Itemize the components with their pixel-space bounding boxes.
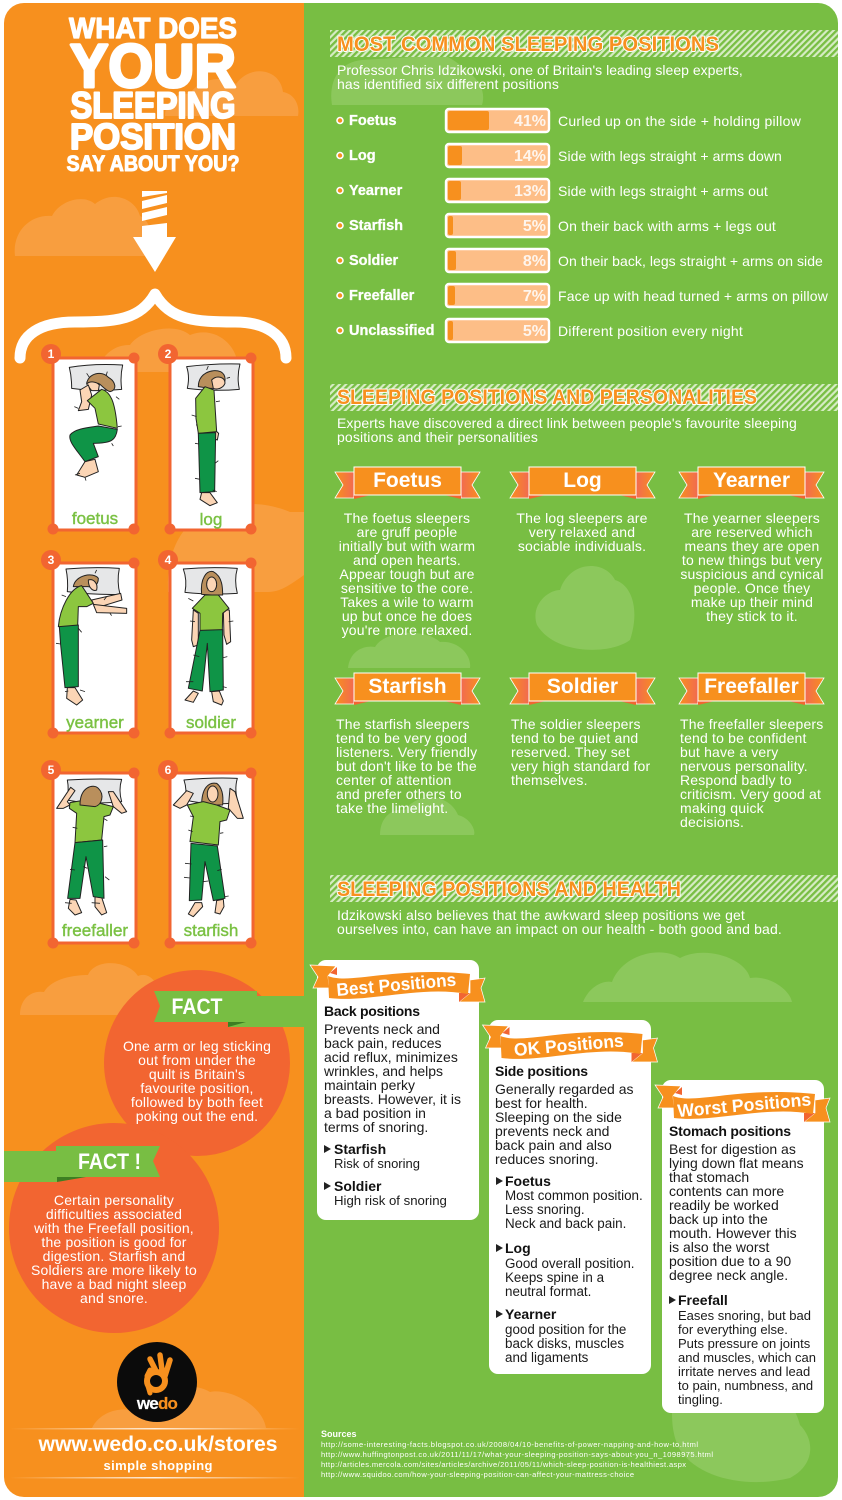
figure: yearner [56,568,127,705]
text: foetus [339,510,475,638]
text: worst intro: position due to a 90 [669,1253,791,1269]
background clouds: orange [15,71,304,1428]
item: yearner: Yearner [505,1306,557,1322]
section heading: personalities: SLEEPING POSITIONS AND PERSONALITIES [337,386,757,409]
text: starfish: take the limelight. [336,800,448,816]
text: log: The log sleepers are [516,510,648,526]
text: foetus: and open hearts. [353,552,461,568]
sources: Sources [321,1429,357,1439]
row: foetus: Foetus [349,113,397,129]
ribbon: starfish [335,673,480,705]
intro: health: Idzikowski also believes that the awkward sleep positions we get [337,907,745,923]
panel: green right column [304,3,838,1497]
fact text 1: quilt is Britain's [149,1066,245,1082]
title: WHAT DOES [69,13,237,45]
fact text 2: Certain personality [54,1192,174,1208]
bar chart [337,109,829,342]
fact circle 1 [104,970,304,1156]
item: soldier [324,1178,447,1208]
fact banner 2 [4,1146,160,1182]
title: SLEEPING [70,85,236,126]
text: freefaller: decisions. [680,814,744,830]
fact text 2: with the Freefall position, [33,1220,194,1236]
section heading: health [330,875,838,902]
text: worst intro: is also the worst [669,1239,769,1255]
text: log: very relaxed and [529,524,635,540]
text: yearner: people. Once they [694,580,810,596]
text: freefaller: criticism. Very good at [680,786,821,802]
item: foetus: Less snoring. [505,1202,585,1217]
text: starfish: tend to be very good [336,730,467,746]
arrow [133,191,176,272]
title: YOUR [70,32,236,100]
text: freefaller: Respond badly to [680,772,792,788]
text: yearner: are reserved which [691,524,813,540]
item: foetus: Neck and back pain. [505,1216,626,1231]
text: worst intro: contents can more [669,1183,784,1199]
text: starfish: and prefer others to [336,786,462,802]
text: freefaller [680,716,823,830]
row: foetus: 41% [514,113,546,130]
ribbon: best positions [310,965,485,1002]
card 4: soldier: 4 [165,553,172,567]
row: foetus: Curled up on the side + holding pillow [558,113,802,129]
text: worst intro: mouth. However this [669,1225,797,1241]
section heading: most common [330,30,838,57]
text: yearner: The yearner sleepers [684,510,820,526]
item: freefall: to pain, numbness, and [678,1378,813,1393]
text: worst intro: degree neck angle. [669,1267,788,1283]
panel: worst positions: Stomach positions [669,1123,791,1139]
row: foetus [337,109,802,132]
item: yearner: and ligaments [505,1350,589,1365]
ribbon: ok positions [482,1025,658,1062]
text: freefaller: nervous personality. [680,758,808,774]
sources: http://some-interesting-facts.blogspot.co.uk/2008/04/10-benefits-of-power-napping-and-how-to.html [321,1440,698,1449]
row: freefaller: Face up with head turned + arms on pillow [558,288,829,304]
card 2: log [158,344,256,534]
item: yearner: back disks, muscles [505,1336,624,1351]
text: soldier: very high standard for [511,758,651,774]
fact text 1: out from under the [138,1052,256,1068]
item: log: Keeps spine in a [505,1270,605,1285]
item: freefall: irritate nerves and lead [678,1364,810,1379]
intro: personalities: positions and their personalities [337,429,538,445]
panel: ok positions [482,1020,658,1374]
website: www.wedo.co.uk/stores [37,1433,278,1456]
ribbon: foetus: Foetus [373,469,442,492]
text: best intro: a bad position in [324,1105,426,1121]
text: foetus: Appear tough but are [339,566,475,582]
logo [117,1342,197,1422]
intro: most common [337,62,743,92]
fact banner 2: FACT ! [78,1149,141,1174]
figure: log [187,364,240,506]
fact text 1: poking out the end. [136,1108,258,1124]
text: foetus: are gruff people [357,524,457,540]
ribbon: yearner: Yearner [713,469,790,492]
card 2: log: log [200,510,222,529]
text: starfish: center of attention [336,772,452,788]
figure: soldier [183,568,237,705]
row: log: 14% [514,148,546,165]
text: soldier: reserved. They set [511,744,630,760]
fact text 1 [123,1038,271,1124]
card 5: freefaller: 5 [48,763,55,777]
sources: http://articles.mercola.com/sites/articles/archive/2011/05/11/which-sleep-position-is-healthiest.aspx [321,1460,686,1469]
fact text 1: favourite position, [140,1080,254,1096]
text: yearner [680,510,824,624]
intro: most common: Professor Chris Idzikowski, one of Britain's leading sleep experts, [337,62,743,78]
panel: best positions [310,960,485,1220]
text: foetus: initially but with warm [339,538,475,554]
footer divider lines [10,1428,300,1478]
item: soldier: High risk of snoring [334,1193,447,1208]
panel: orange left column [4,3,304,1497]
card 2: log: 2 [165,347,172,361]
row: unclassified: Unclassified [349,323,434,339]
item: foetus [496,1173,643,1231]
row: freefaller [337,284,829,307]
text: yearner: means they are open [685,538,819,554]
ribbon: starfish: Starfish [368,675,447,698]
row: unclassified: Different position every night [558,323,743,339]
ribbon: log: Log [563,469,602,492]
card 6: starfish: 6 [165,763,172,777]
text: ok intro: best for health. [495,1095,588,1111]
ribbon: freefaller [679,673,824,705]
card 1: foetus [41,344,140,534]
text: freefaller: making quick [680,800,765,816]
row: unclassified [337,319,743,342]
intro: health: ourselves into, can have an impact on our health - both good and bad. [337,921,782,937]
text: yearner: make up their mind [691,594,813,610]
text: starfish: but don't like to be the [336,758,477,774]
text: soldier [511,716,651,788]
text: ok intro: prevents neck and [495,1123,609,1139]
title: POSITION [70,116,236,157]
figure: foetus [69,365,123,481]
item: starfish: Risk of snoring [334,1156,420,1171]
row: starfish: 5% [523,218,546,235]
row: soldier [337,249,823,272]
ribbon: log [510,467,655,499]
text: ok intro: Sleeping on the side [495,1109,622,1125]
background clouds: green [331,55,810,1482]
panel: best positions: Back positions [324,1003,420,1019]
fact banner 1 [154,991,304,1027]
text: ok intro: back pain and also [495,1137,612,1153]
fact text 2: the position is good for [41,1234,187,1250]
card 5: freefaller [41,760,140,948]
logo: wedo [136,1394,178,1413]
text: freefaller: but have a very [680,744,778,760]
fact text 2: digestion. Starfish and [43,1248,185,1264]
card 6: starfish: starfish [184,921,238,940]
panel: worst positions [655,1080,830,1413]
fact banner 1: FACT [172,994,223,1019]
card 5: freefaller: freefaller [62,921,128,940]
text: ok intro [495,1081,634,1167]
title [66,13,240,176]
row: soldier: On their back, legs straight + arms on side [558,253,823,269]
text: freefaller: tend to be confident [680,730,807,746]
row: soldier: Soldier [349,253,399,269]
row: log [337,144,782,167]
sources: http://www.huffingtonpost.co.uk/2011/11/17/what-your-sleeping-position-says-about-you_n_1098975.html [321,1450,713,1459]
text: best intro: breasts. However, it is [324,1091,461,1107]
row: starfish: On their back with arms + legs out [558,218,776,234]
icon: ok hand [147,1355,170,1393]
item: freefall: Puts pressure on joints [678,1336,811,1351]
figure: freefaller [57,779,127,915]
row: log: Log [349,148,376,164]
card 3: yearner: yearner [66,713,124,732]
ribbon: best positions: Best Positions [336,970,457,1000]
ribbon: freefaller: Freefaller [704,675,799,698]
ribbon: ok positions: OK Positions [513,1030,624,1060]
text: log: sociable individuals. [518,538,646,554]
card 3: yearner: 3 [48,553,55,567]
item: freefall: tingling. [678,1392,723,1407]
fact text 2 [31,1192,197,1306]
intro: most common: has identified six different positions [337,76,559,92]
row: soldier: 8% [523,253,546,270]
card 1: foetus: foetus [72,509,118,528]
row: starfish [337,214,776,237]
title: SAY ABOUT YOU? [66,151,240,176]
row: yearner: 13% [514,183,546,200]
text: starfish [336,716,477,816]
text: soldier: The soldier sleepers [511,716,641,732]
item: starfish: Starfish [334,1141,386,1157]
brace [20,294,286,358]
text: foetus: sensitive to the core. [341,580,473,596]
sources [321,1429,713,1479]
item: log [496,1240,635,1299]
fact text 2: have a bad night sleep [42,1276,186,1292]
tagline: simple shopping [104,1458,213,1473]
item: freefall: for everything else. [678,1322,788,1337]
text: best intro [323,1021,461,1135]
fact circle 2 [4,1123,219,1333]
item: yearner [496,1306,626,1365]
intro: health [337,907,782,937]
text: foetus: The foetus sleepers [344,510,470,526]
card 3: yearner [41,550,140,738]
text: best intro: wrinkles, and helps [323,1063,443,1079]
item: yearner: good position for the [505,1322,626,1337]
card 4: soldier: soldier [186,713,236,732]
item: freefall: and muscles, which can [678,1350,816,1365]
row: log: Side with legs straight + arms down [558,148,782,164]
panel: ok positions: Side positions [495,1063,588,1079]
row: freefaller: 7% [523,288,546,305]
figure: starfish [173,778,243,917]
text: worst intro: lying down flat means [669,1155,804,1171]
text: best intro: terms of snoring. [324,1119,428,1135]
row: unclassified: 5% [523,323,546,340]
text: worst intro: readily be worked [669,1197,779,1213]
item: log: Log [505,1240,531,1256]
card 6: starfish [158,760,256,948]
row: freefaller: Freefaller [349,288,415,304]
row: yearner [337,179,768,202]
item: foetus: Most common position. [505,1188,643,1203]
text: ok intro: Generally regarded as [495,1081,634,1097]
text: freefaller: The freefaller sleepers [680,716,823,732]
ribbon: worst positions [655,1085,830,1122]
sources: http://www.squidoo.com/how-your-sleeping-position-can-affect-your-mattress-choice [321,1470,634,1479]
ribbon: soldier: Soldier [547,675,618,698]
text: best intro: acid reflux, minimizes [324,1049,458,1065]
text: ok intro: reduces snoring. [495,1151,599,1167]
intro: personalities: Experts have discovered a direct link between people's favourite sleeping [337,415,797,431]
text: best intro: Prevents neck and [324,1021,440,1037]
item: freefall [669,1292,816,1407]
text: soldier: themselves. [511,772,588,788]
card 4: soldier [158,550,256,738]
item: foetus: Foetus [505,1173,551,1189]
fact text 1: One arm or leg sticking [123,1038,271,1054]
text: foetus: Takes a wile to warm [340,594,474,610]
text: log [516,510,648,554]
item: freefall: Freefall [678,1292,728,1308]
item: starfish [324,1141,420,1171]
fact text 2: and snore. [80,1290,148,1306]
item: soldier: Soldier [334,1178,382,1194]
section heading: most common: MOST COMMON SLEEPING POSITIONS [337,33,719,56]
text: best intro: back pain, reduces [324,1035,442,1051]
item: log: Good overall position. [505,1256,635,1271]
ribbon: worst positions: Worst Positions [677,1089,812,1121]
ribbon: soldier [510,673,655,705]
ribbon: foetus [335,467,480,499]
fact text 2: difficulties associated [46,1206,182,1222]
text: worst intro: that stomach [669,1169,749,1185]
text: starfish: The starfish sleepers [336,716,470,732]
text: starfish: listeners. Very friendly [336,744,477,760]
fact text 2: Soldiers are more likely to [31,1262,197,1278]
item: log: neutral format. [505,1284,591,1299]
ribbon: yearner [679,467,824,499]
text: soldier: tend to be quiet and [511,730,638,746]
fact text 1: followed by both feet [131,1094,263,1110]
text: yearner: suspicious and cynical [680,566,824,582]
intro: personalities [337,415,797,445]
text: yearner: they stick to it. [706,608,798,624]
row: starfish: Starfish [349,218,403,234]
text: foetus: up but once he does [342,608,472,624]
text: worst intro [669,1141,804,1283]
text: worst intro: Best for digestion as [669,1141,796,1157]
text: best intro: maintain perky [324,1077,415,1093]
row: yearner: Side with legs straight + arms out [558,183,768,199]
section heading: health: SLEEPING POSITIONS AND HEALTH [337,878,681,901]
row: yearner: Yearner [349,183,403,199]
card 1: foetus: 1 [48,347,55,361]
text: foetus: you're more relaxed. [342,622,472,638]
item: freefall: Eases snoring, but bad [678,1308,811,1323]
text: yearner: to new things but very [682,552,822,568]
text: worst intro: back up into the [669,1211,768,1227]
